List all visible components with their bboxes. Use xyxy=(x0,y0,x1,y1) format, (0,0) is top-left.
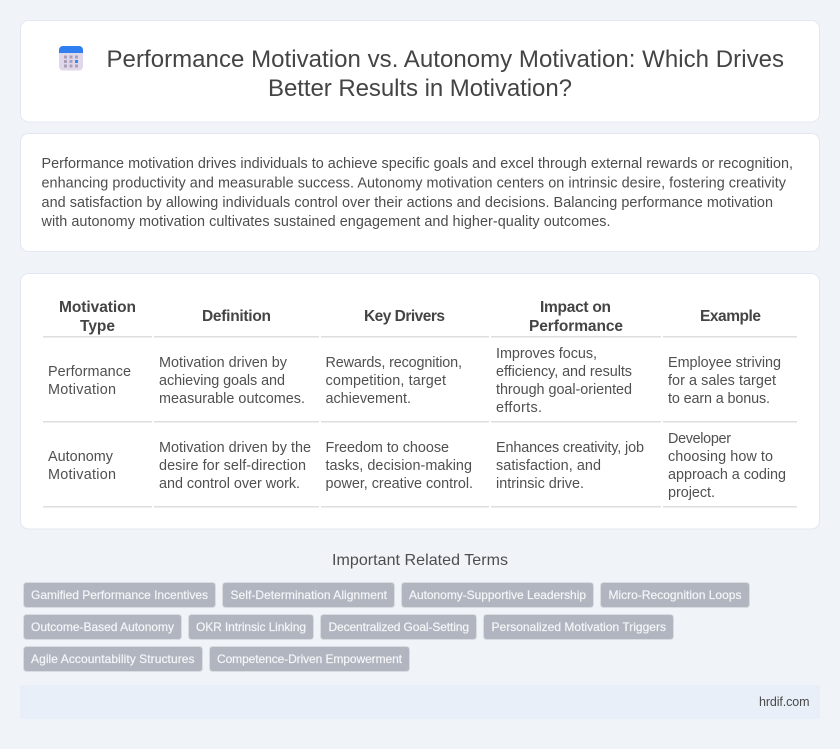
table row: performance motivation: Rewards, recognition, xyxy=(326,355,462,371)
table row: performance motivation: Employee striving xyxy=(668,355,781,371)
table row: autonomy motivation: choosing how to xyxy=(668,449,773,465)
table row: performance motivation: for a sales target xyxy=(668,373,776,389)
related term chips: Self-Determination Alignment xyxy=(230,588,388,602)
table row: autonomy motivation xyxy=(43,431,797,508)
table row: autonomy motivation: Motivation driven by the xyxy=(159,440,311,456)
table row: autonomy motivation: project. xyxy=(668,485,715,501)
panel: comparison table xyxy=(20,274,820,529)
table row: performance motivation: Improves focus, xyxy=(496,346,597,362)
table header row: Key Drivers xyxy=(364,308,445,325)
title xyxy=(106,46,784,102)
table header row: Type xyxy=(80,318,115,335)
table row: autonomy motivation: desire for self-direction xyxy=(159,458,306,474)
panel: title card xyxy=(20,20,820,122)
heading: important related terms: Important Related Terms xyxy=(332,552,508,569)
table row: performance motivation: to earn a bonus. xyxy=(668,391,770,407)
related term chips: Competence-Driven Empowerment xyxy=(217,652,403,666)
table header row: Performance xyxy=(529,318,623,335)
table header row xyxy=(43,299,797,338)
table row: autonomy motivation: approach a coding xyxy=(668,467,786,483)
text block: introduction: enhancing productivity and measurable success. Autonomy motivation centers on intrinsic desire, fostering creativity xyxy=(42,176,787,192)
table header row: Impact on xyxy=(540,299,611,316)
panel: introduction xyxy=(20,134,820,252)
table row: performance motivation: achievement. xyxy=(326,391,411,407)
table header row: Example xyxy=(700,308,761,325)
table row: autonomy motivation: Motivation xyxy=(48,467,116,483)
table row: performance motivation: Motivation driven by xyxy=(159,355,288,371)
table row: autonomy motivation: Freedom to choose xyxy=(326,440,449,456)
related term chips: Autonomy-Supportive Leadership xyxy=(409,588,586,602)
related term chips: Gamified Performance Incentives xyxy=(31,588,208,602)
table header row: Motivation xyxy=(59,299,136,316)
table row: autonomy motivation: Enhances creativity, job xyxy=(496,440,644,456)
related term chips: Personalized Motivation Triggers xyxy=(492,620,666,634)
table row: autonomy motivation: Developer xyxy=(668,431,731,447)
related term chips: Decentralized Goal-Setting xyxy=(328,620,469,634)
table row: performance motivation: efforts. xyxy=(496,400,542,416)
table row: performance motivation: Performance xyxy=(48,364,131,380)
table row: autonomy motivation: and control over work. xyxy=(159,476,300,492)
related term chips xyxy=(24,582,750,672)
table row: performance motivation: measurable outcomes. xyxy=(159,391,305,407)
title: Performance Motivation vs. Autonomy Motivation: Which Drives xyxy=(106,46,784,73)
table row: performance motivation xyxy=(43,346,797,422)
text block: introduction xyxy=(40,156,793,230)
table row: performance motivation: through goal-oriented xyxy=(496,382,632,398)
table row: autonomy motivation: Autonomy xyxy=(48,449,114,465)
footer bar xyxy=(20,685,820,719)
related term chips: OKR Intrinsic Linking xyxy=(196,620,306,634)
table row: performance motivation: Motivation xyxy=(48,382,116,398)
table row: autonomy motivation: tasks, decision-making xyxy=(326,458,472,474)
table row: autonomy motivation: power, creative control. xyxy=(326,476,473,492)
related term chips: Agile Accountability Structures xyxy=(31,652,194,666)
table row: performance motivation: competition, target xyxy=(326,373,446,389)
text block: introduction: Performance motivation drives individuals to achieve specific goals and excel through external rewards or recognition, xyxy=(42,156,793,172)
icon: calendar xyxy=(59,46,83,70)
table row: performance motivation: achieving goals and xyxy=(159,373,285,389)
table header row: Definition xyxy=(202,308,271,325)
footer bar: hrdif.com xyxy=(759,695,810,709)
text block: introduction: and satisfaction by allowing individuals control over their actions and decisions. Balancing performance motivation xyxy=(42,195,773,211)
table row: autonomy motivation: satisfaction, and xyxy=(496,458,601,474)
text block: introduction: with autonomy motivation cultivates sustained engagement and higher-quality outcomes. xyxy=(40,214,610,230)
related term chips: Micro-Recognition Loops xyxy=(608,588,742,602)
table row: performance motivation: efficiency, and results xyxy=(496,364,632,380)
related term chips: Outcome-Based Autonomy xyxy=(31,620,174,634)
title: Better Results in Motivation? xyxy=(268,75,572,102)
table row: autonomy motivation: intrinsic drive. xyxy=(496,476,584,492)
